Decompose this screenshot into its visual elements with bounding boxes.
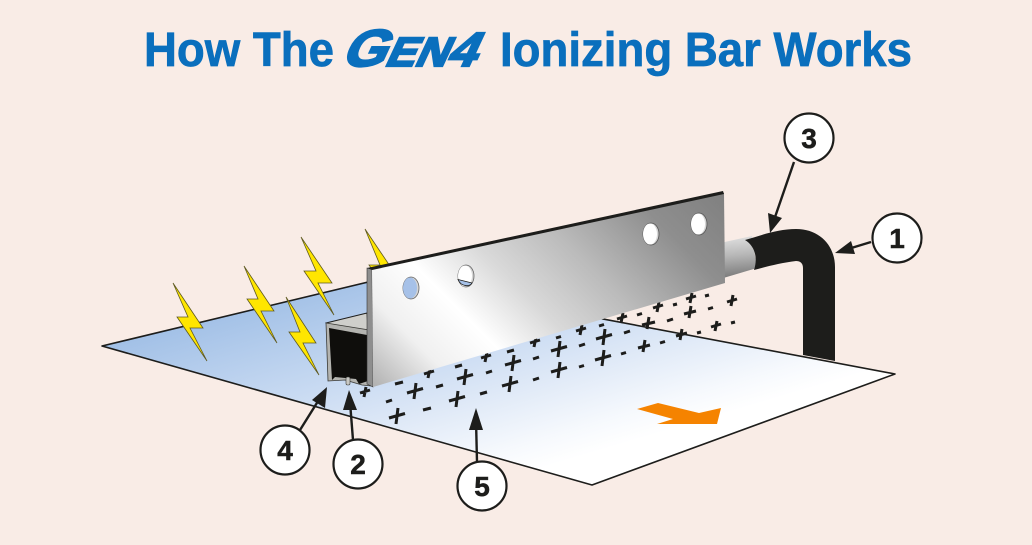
- leader arrow 5: [469, 408, 483, 462]
- channel top face: [326, 313, 369, 332]
- callout 3: [768, 114, 834, 233]
- callout 1: [835, 214, 922, 262]
- callout 5: [458, 408, 506, 510]
- ionizing emitter pin: [346, 377, 350, 385]
- plate side edge: [367, 268, 373, 387]
- channel interior: [329, 328, 368, 384]
- logo: GEN4: GEN4: [335, 19, 496, 77]
- callout 4: [260, 387, 327, 474]
- ion charges: minus signs: [386, 295, 735, 410]
- plate face: [372, 193, 725, 387]
- mounting hole 1: [403, 277, 419, 299]
- number badge 1: 1: [889, 223, 905, 254]
- black cable: [745, 229, 835, 361]
- leader arrow 3: [768, 162, 794, 233]
- conveying direction arrow: [637, 403, 721, 424]
- title: [144, 19, 912, 77]
- mounting hole 2: [458, 265, 474, 287]
- ion charges: plus signs: [360, 293, 737, 424]
- cable assembly: [720, 229, 835, 361]
- channel housing: [326, 323, 372, 386]
- leader arrow 4: [300, 387, 327, 430]
- plate top edge: [367, 191, 724, 270]
- mounting hole 4: [691, 213, 707, 235]
- number badge 2: 2: [350, 449, 366, 480]
- ionizing bar: [326, 191, 725, 387]
- title text: Ionizing Bar Works: Ionizing Bar Works: [500, 24, 912, 77]
- sheet of material: [102, 278, 895, 485]
- number badge 3: 3: [801, 123, 817, 154]
- number badge 4: 4: [277, 435, 293, 466]
- leader arrow 1: [835, 241, 871, 254]
- lightning bolts: [173, 229, 398, 375]
- title text: How The: How The: [144, 24, 334, 77]
- leader arrow 2: [343, 390, 357, 440]
- number badge 5: 5: [474, 471, 490, 502]
- mounting hole 3: [643, 223, 659, 245]
- cable sleeve: [720, 236, 757, 279]
- callout 2: [334, 390, 382, 488]
